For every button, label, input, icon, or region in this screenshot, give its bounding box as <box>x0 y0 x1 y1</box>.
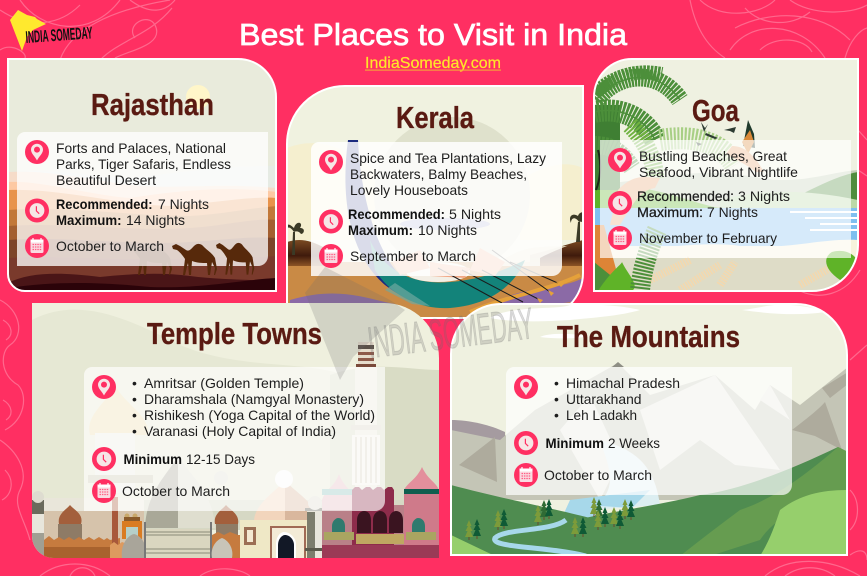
panel: Rajasthan <box>7 58 277 292</box>
left green slope <box>451 485 594 556</box>
orange pavilion <box>122 514 142 541</box>
brown dome right <box>212 505 240 558</box>
destinations list: • <box>554 407 559 423</box>
left building <box>44 511 144 558</box>
description text <box>639 148 798 180</box>
season text: November to February <box>639 230 777 246</box>
river head <box>564 490 650 518</box>
duration text <box>348 206 501 238</box>
beige building with arch <box>240 520 308 558</box>
logo: India Someday <box>10 10 93 51</box>
icon: location pin <box>92 375 116 399</box>
panel border <box>287 86 583 318</box>
panel border <box>451 304 847 555</box>
panel: Goa <box>593 58 859 292</box>
duration text <box>56 196 209 228</box>
description text: Backwaters, Balmy Beaches, <box>350 166 527 182</box>
icon: calendar <box>514 463 538 487</box>
birds <box>696 122 736 146</box>
left tower <box>32 491 44 558</box>
destinations list: Leh Ladakh <box>566 407 637 423</box>
destinations list: • <box>132 407 137 423</box>
destinations list: Rishikesh (Yoga Capital of the World) <box>144 407 375 423</box>
rock mountains <box>451 363 848 500</box>
duration text: Recommended: <box>56 196 152 212</box>
destinations list: • <box>132 423 137 439</box>
canopy and rowers <box>400 218 490 230</box>
destinations list: Varanasi (Holy Capital of India) <box>144 423 336 439</box>
pine trees <box>465 497 635 540</box>
duration text: Maximum: <box>56 212 122 228</box>
duration text: Minimum <box>124 451 182 467</box>
destinations list: Uttarakhand <box>566 391 642 407</box>
destinations list: Dharamshala (Namgyal Monastery) <box>144 391 364 407</box>
duration text: Recommended: <box>637 188 734 204</box>
icon: location pin <box>25 140 49 164</box>
duration text: Maximum: <box>637 204 703 220</box>
duration text: Minimum <box>546 435 604 451</box>
description text: Seafood, Vibrant Nightlife <box>639 164 798 180</box>
panel border <box>594 59 858 291</box>
destinations list: • <box>132 375 137 391</box>
description text <box>56 140 231 188</box>
palm trees <box>286 212 588 255</box>
icon: calendar <box>608 226 632 250</box>
panel: Temple Towns <box>32 303 439 558</box>
icon: location pin <box>514 375 538 399</box>
panel border <box>8 59 276 291</box>
info card <box>600 140 851 258</box>
icon: yellow India map <box>10 10 46 51</box>
heading: Rajasthan <box>91 87 214 122</box>
brown dome left <box>58 505 82 540</box>
peach dome <box>254 470 310 520</box>
heading: The Mountains <box>557 319 740 354</box>
info card <box>84 367 385 511</box>
logo wordmark: INDIA SOMEDAY <box>25 23 93 47</box>
duration text: Recommended: <box>348 206 445 222</box>
heading: Kerala <box>396 100 475 135</box>
icon: clock <box>608 191 632 215</box>
mosque dome <box>89 385 148 435</box>
destinations list <box>132 375 375 439</box>
snake boat hull <box>346 140 398 294</box>
duration text <box>546 435 660 451</box>
destinations list: Himachal Pradesh <box>566 375 680 391</box>
white domes <box>145 455 178 528</box>
background ornament: top left <box>0 0 175 60</box>
duration text: 10 Nights <box>418 222 477 238</box>
info card <box>311 142 562 276</box>
icon: calendar <box>25 234 49 258</box>
icon: clock <box>319 210 343 234</box>
icon: calendar <box>92 479 116 503</box>
panel: Kerala <box>286 85 588 319</box>
info card <box>506 367 792 495</box>
description text: Bustling Beaches, Great <box>639 148 787 164</box>
icon: clock <box>25 198 49 222</box>
background ornament: top right <box>690 0 867 58</box>
icon: clock <box>514 431 538 455</box>
duration text <box>637 188 790 220</box>
heading: Goa <box>692 93 740 128</box>
duration text: 7 Nights <box>158 196 209 212</box>
icon: clock <box>92 447 116 471</box>
duration text <box>124 451 255 467</box>
icon: location pin <box>608 148 632 172</box>
scene: temple skyline <box>32 303 439 558</box>
duration text: 5 Nights <box>449 206 501 222</box>
website link: IndiaSomeday.com <box>365 55 501 72</box>
season text: October to March <box>544 467 652 483</box>
icon: location pin <box>319 150 343 174</box>
heading: Temple Towns <box>147 316 322 351</box>
text: INDIA SOMEDAY <box>365 299 536 368</box>
background ornament: left edge <box>0 300 30 540</box>
scene: mountains and river <box>450 303 848 556</box>
watermark: India Someday logo <box>305 267 536 380</box>
description text <box>350 150 546 198</box>
destinations list <box>554 375 680 423</box>
destinations list: • <box>554 391 559 407</box>
destinations list: • <box>554 375 559 391</box>
destinations list: Amritsar (Golden Temple) <box>144 375 304 391</box>
duration text: 14 Nights <box>126 212 185 228</box>
scene: beach with palms <box>593 58 859 292</box>
description text: Parks, Tiger Safaris, Endless <box>56 156 231 172</box>
orange wall left <box>44 536 120 558</box>
description text: Beautiful Desert <box>56 172 156 188</box>
pink palace <box>322 467 439 558</box>
info card <box>17 132 268 266</box>
camel silhouette, faded <box>127 244 172 275</box>
camel silhouette, small <box>216 243 254 275</box>
right green slope <box>585 447 848 556</box>
winding river <box>495 520 586 556</box>
season text: September to March <box>350 248 476 264</box>
central gate <box>144 522 212 558</box>
season text: October to March <box>56 238 164 254</box>
description text: Spice and Tea Plantations, Lazy <box>350 150 546 166</box>
panel: The Mountains <box>450 303 848 556</box>
duration text: 3 Nights <box>738 188 790 204</box>
oars <box>438 250 560 303</box>
duration text: 2 Weeks <box>608 435 660 451</box>
duration text: 7 Nights <box>707 204 758 220</box>
season text: October to March <box>122 483 230 499</box>
duration text: Maximum: <box>348 222 413 238</box>
duration text: 12-15 Days <box>186 451 255 467</box>
camel silhouette <box>172 244 217 275</box>
description text: Forts and Palaces, National <box>56 140 226 156</box>
scene: snake boat on backwaters <box>286 85 588 319</box>
icon: calendar <box>319 244 343 268</box>
grey tower <box>305 502 322 558</box>
minaret <box>352 342 380 485</box>
clouds <box>490 305 825 338</box>
palm fronds <box>594 72 735 190</box>
description text: Lovely Houseboats <box>350 182 468 198</box>
destinations list: • <box>132 391 137 407</box>
palm trunks and foliage <box>595 225 616 275</box>
scene: desert <box>7 58 277 292</box>
title: Best Places to Visit in India <box>239 17 628 52</box>
background ornament: bottom <box>40 130 867 576</box>
far ridge <box>452 420 505 440</box>
